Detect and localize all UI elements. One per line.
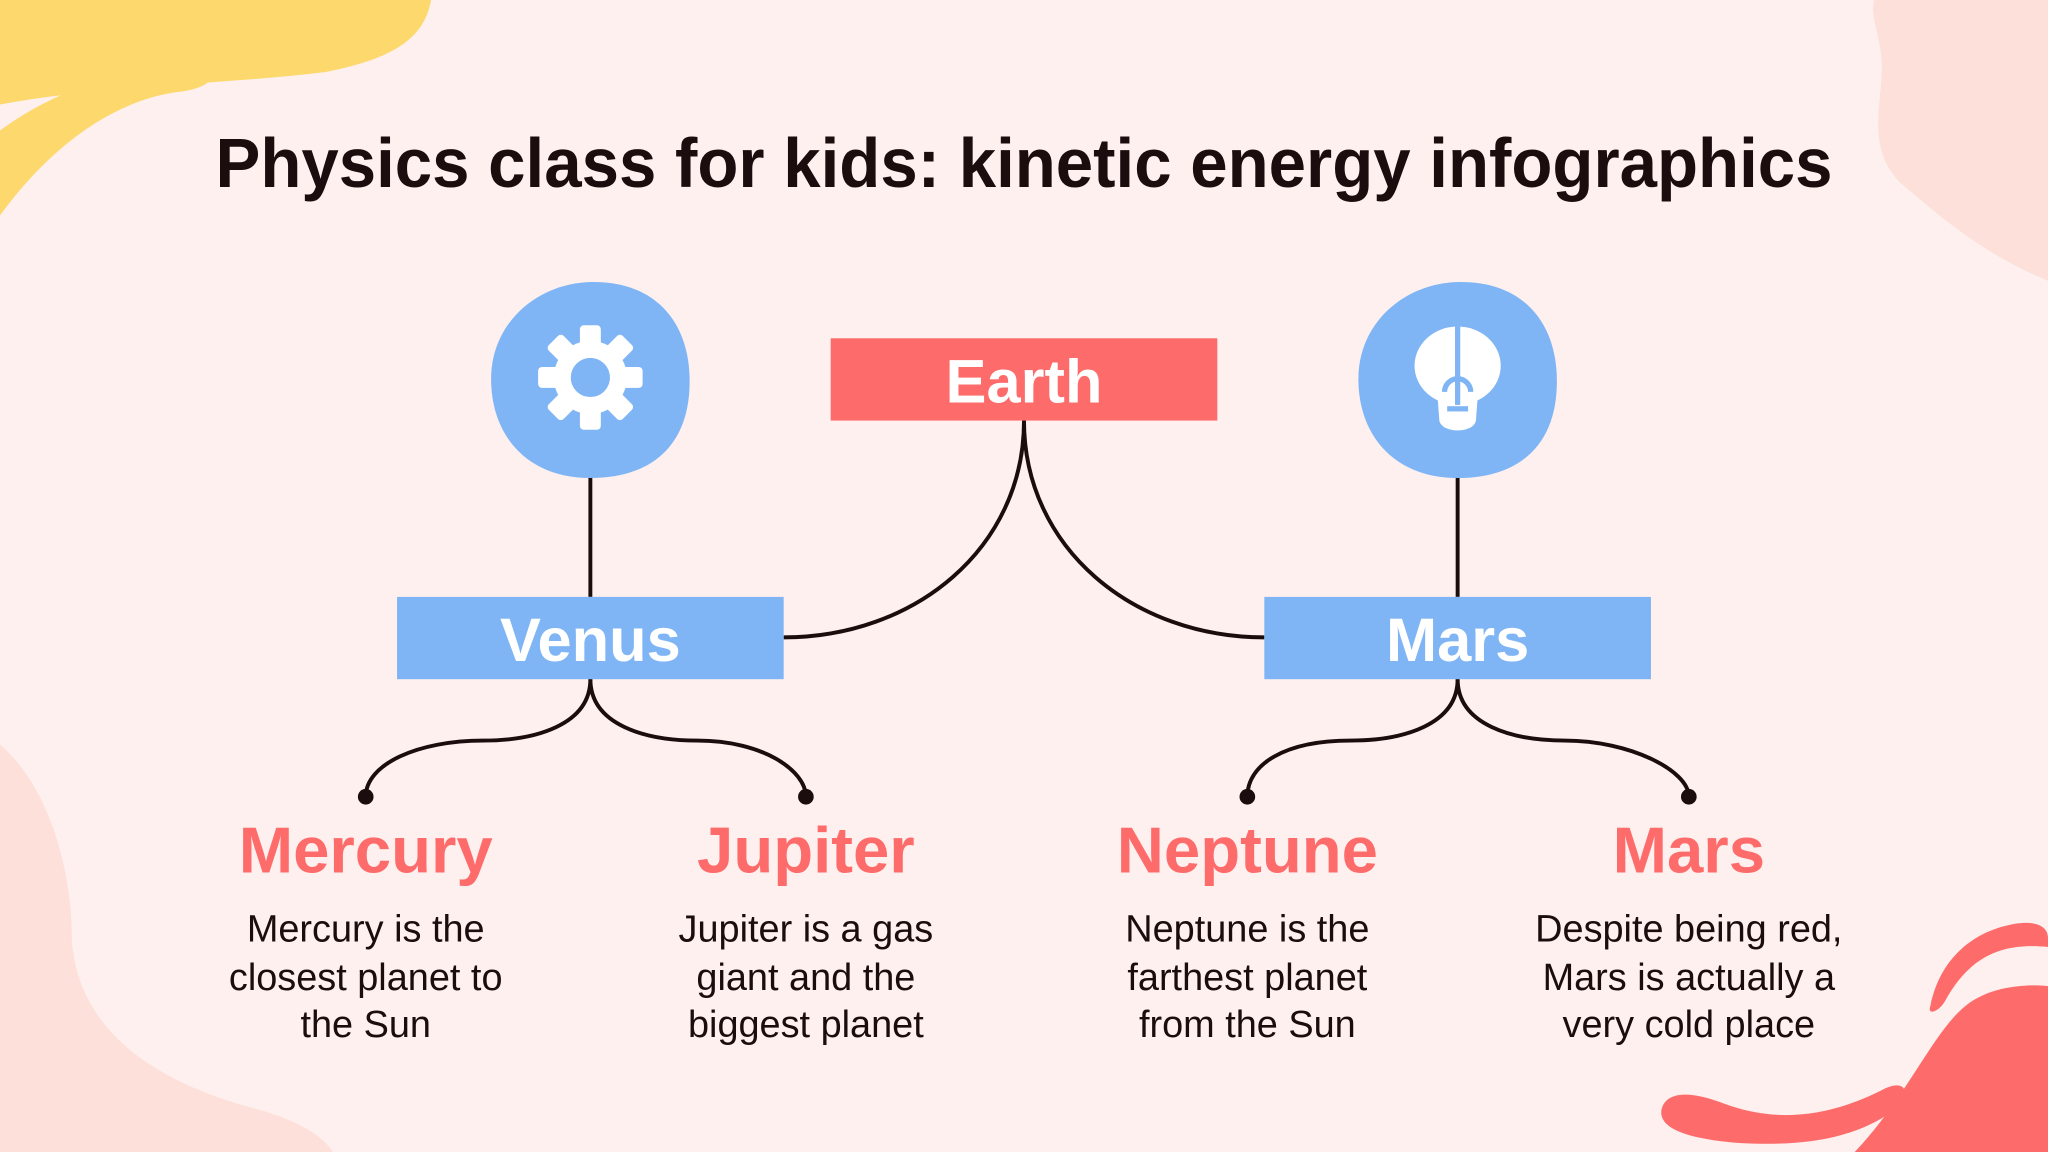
item: Jupiter: Jupiter is a gas xyxy=(679,909,933,951)
item: Mars: Mars xyxy=(1613,813,1765,886)
item: Mercury: Mercury is the xyxy=(247,909,485,951)
item: Jupiter: biggest planet xyxy=(688,1004,924,1046)
connectors xyxy=(366,421,1689,797)
item: Mercury: Mercury xyxy=(239,813,493,886)
item: Mars: Mars is actually a xyxy=(1543,957,1836,999)
item: Mercury: the Sun xyxy=(300,1004,431,1046)
item: Neptune: farthest planet xyxy=(1127,957,1368,999)
box: Venus: Venus xyxy=(500,606,681,675)
item: Mercury xyxy=(229,813,503,1046)
box: Venus xyxy=(397,597,784,679)
item: Jupiter xyxy=(679,813,933,1046)
item: Neptune: from the Sun xyxy=(1139,1004,1356,1046)
item: Mars: very cold place xyxy=(1563,1004,1815,1046)
item: Jupiter: Jupiter xyxy=(697,813,915,886)
decoration: bottom-right coral blobs xyxy=(1661,923,2048,1152)
item: Mars: Despite being red, xyxy=(1535,909,1842,951)
decoration: top-right pink blob xyxy=(1873,0,2048,281)
item: Neptune: Neptune is the xyxy=(1125,909,1369,951)
item: Neptune: Neptune xyxy=(1117,813,1378,886)
item: Mercury: closest planet to xyxy=(229,957,503,999)
box: Earth xyxy=(831,338,1217,421)
box: Mars xyxy=(1264,597,1651,679)
decoration: top-left yellow blob xyxy=(0,0,431,216)
icon: gear blob xyxy=(491,282,690,478)
decoration: bottom-left pink blob xyxy=(0,744,333,1152)
item: Mars xyxy=(1535,813,1842,1046)
item: Jupiter: giant and the xyxy=(696,957,915,999)
box: Earth: Earth xyxy=(946,347,1102,416)
item: Neptune xyxy=(1117,813,1378,1046)
title: Physics class for kids: kinetic energy infographics xyxy=(216,124,1832,202)
box: Mars: Mars xyxy=(1386,606,1529,675)
icon: brain bulb blob xyxy=(1358,282,1557,478)
